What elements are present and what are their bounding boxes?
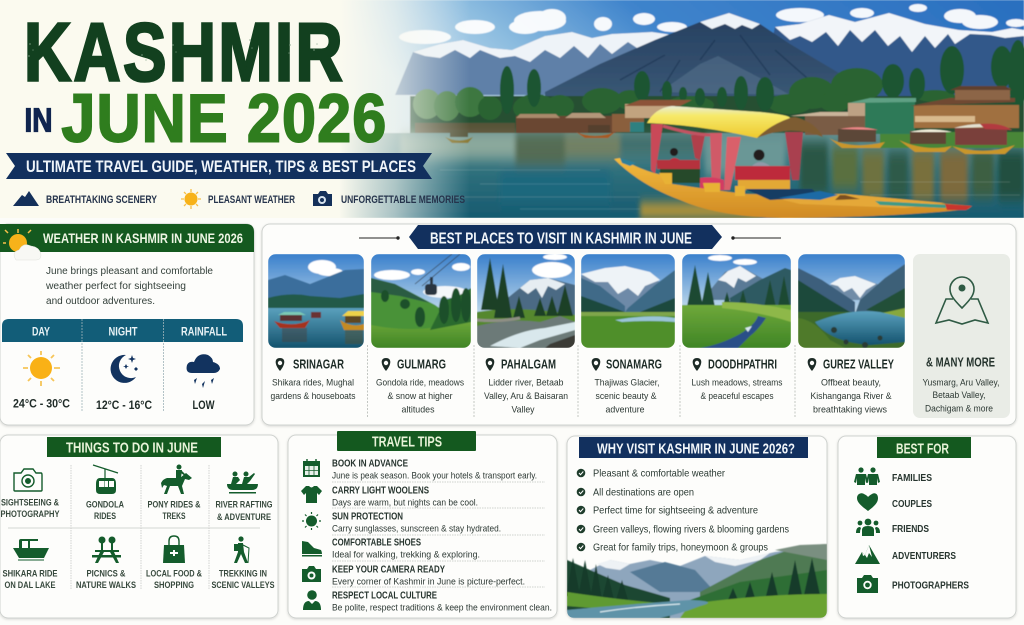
hull bbox=[614, 158, 972, 218]
snowy range right bbox=[773, 17, 1024, 97]
shikara bbox=[614, 106, 972, 218]
tip: carry light woolens bbox=[301, 486, 478, 508]
place: Doodhpathri: DOODHPATHRI bbox=[708, 358, 777, 372]
left houses bbox=[516, 116, 616, 133]
audience: families bbox=[854, 467, 932, 485]
curtains bbox=[651, 124, 663, 174]
place: Pahalgam: Valley, Aru & Baisaran bbox=[484, 391, 568, 402]
activity: local food and shopping: SHOPPING bbox=[154, 580, 194, 591]
weather values: 12°C - 16°C bbox=[96, 398, 152, 412]
activity: rafting bbox=[216, 472, 272, 523]
activity: gondola: RIDES bbox=[94, 511, 116, 522]
why visit heading bbox=[579, 437, 808, 458]
activity: shikara bbox=[2, 539, 58, 591]
central dark mountain bbox=[544, 22, 838, 97]
passengers bbox=[670, 148, 678, 156]
photo: Gurez Valley bbox=[798, 254, 905, 348]
weather table header: RAINFALL bbox=[181, 324, 227, 338]
panel: why visit bbox=[566, 436, 827, 618]
tip: respect local culture bbox=[303, 590, 552, 614]
hero photo: lake, mountains and shikara bbox=[0, 0, 1024, 218]
tip: camera: KEEP YOUR CAMERA READY bbox=[332, 564, 445, 576]
reason: green valleys: Green valleys, flowing rivers & blooming gardens bbox=[593, 524, 789, 536]
icon: night moon bbox=[111, 355, 138, 383]
reason: destinations open: All destinations are open bbox=[593, 486, 694, 498]
card: many more: Dachigam & more bbox=[925, 404, 993, 414]
weather values: 24°C - 30°C bbox=[13, 396, 70, 410]
deck bbox=[760, 194, 945, 208]
audience: couples: COUPLES bbox=[892, 498, 932, 510]
highlights row bbox=[13, 189, 465, 209]
place: Sonamarg: SONAMARG bbox=[606, 358, 662, 372]
card: many more: Betaab Valley, bbox=[932, 390, 986, 401]
tip: carry light woolens: CARRY LIGHT WOOLENS bbox=[332, 486, 429, 496]
place: Pahalgam: Valley bbox=[512, 404, 535, 416]
tip: book in advance: June is peak season. Book your hotels & transport early. bbox=[332, 470, 537, 482]
reason: family trips: Great for family trips, honeymoon & groups bbox=[593, 542, 768, 554]
activity: gondola: GONDOLA bbox=[86, 500, 124, 510]
title block bbox=[24, 6, 388, 156]
subtitle ribbon: ULTIMATE TRAVEL GUIDE, WEATHER, TIPS & BEST PLACES bbox=[26, 157, 416, 176]
activity: pony rides: TREKS bbox=[162, 511, 186, 522]
title: IN: IN bbox=[24, 102, 52, 138]
small boats bbox=[445, 124, 1015, 154]
icon: sun bbox=[181, 189, 201, 209]
far snowy range bbox=[395, 42, 636, 96]
activity: trekking: SCENIC VALLEYS bbox=[212, 580, 274, 591]
place: Doodhpathri: Lush meadows, streams bbox=[692, 378, 783, 388]
place: Gulmarg: altitudes bbox=[402, 404, 435, 416]
activity: local food and shopping bbox=[146, 536, 202, 591]
weather header bar bbox=[0, 224, 254, 252]
canopy bbox=[647, 106, 790, 138]
activity: shikara: SHIKARA RIDE bbox=[2, 568, 58, 580]
activity: shikara: ON DAL LAKE bbox=[4, 580, 56, 591]
photo: Srinagar bbox=[268, 254, 364, 348]
travel tips heading: TRAVEL TIPS bbox=[372, 434, 442, 450]
card: many more bbox=[913, 254, 1010, 418]
water reflections bbox=[400, 133, 1024, 218]
reason: sightseeing: Perfect time for sightseeing & adventure bbox=[593, 504, 758, 516]
activity: sightseeing bbox=[0, 469, 60, 520]
icon: day sun bbox=[23, 351, 60, 386]
place: Srinagar: Shikara rides, Mughal bbox=[272, 378, 354, 388]
weather values: LOW bbox=[192, 398, 215, 412]
activity: rafting: & ADVENTURE bbox=[217, 512, 271, 523]
weather heading: WEATHER IN KASHMIR IN JUNE 2026 bbox=[43, 230, 243, 246]
round trees bbox=[413, 68, 955, 122]
panel: weather bbox=[0, 224, 254, 425]
place: Gurez Valley: Offbeat beauty, bbox=[821, 378, 881, 388]
place: Pahalgam bbox=[484, 358, 568, 416]
audience: friends: FRIENDS bbox=[892, 523, 929, 535]
photo: Sonamarg bbox=[581, 254, 675, 348]
place: Doodhpathri: & peaceful escapes bbox=[700, 391, 774, 402]
activity: picnics: PICNICS & bbox=[86, 568, 126, 580]
tip: respect local culture: Be polite, respect traditions & keep the environment clean. bbox=[332, 602, 552, 614]
audience: adventurers: ADVENTURERS bbox=[892, 550, 956, 562]
card: many more: & MANY MORE bbox=[926, 356, 995, 370]
icon: sun behind cloud bbox=[3, 229, 41, 260]
tip: sun protection bbox=[302, 512, 501, 534]
tip: carry light woolens: Days are warm, but nights can be cool. bbox=[332, 498, 478, 508]
text: pleasant weather: PLEASANT WEATHER bbox=[208, 194, 295, 206]
weather values bbox=[13, 396, 215, 412]
tip: comfortable shoes bbox=[302, 538, 480, 560]
card: many more: Yusmarg, Aru Valley, bbox=[922, 378, 1000, 388]
text: breathtaking scenery: BREATHTAKING SCENERY bbox=[46, 194, 158, 206]
panel: best places bbox=[262, 224, 1016, 425]
poplars bbox=[500, 40, 1024, 114]
audience: families: FAMILIES bbox=[892, 472, 932, 484]
activity: sightseeing: SIGHTSEEING & bbox=[1, 498, 59, 508]
title: KASHMIR: KASHMIR bbox=[24, 6, 345, 98]
activity: rafting: RIVER RAFTING bbox=[216, 500, 272, 510]
travel tips heading bbox=[337, 431, 476, 451]
best places ribbon heading: BEST PLACES TO VISIT IN KASHMIR IN JUNE bbox=[430, 230, 692, 248]
audience: photographers bbox=[857, 575, 969, 593]
audience: couples bbox=[857, 493, 932, 511]
tip: comfortable shoes: COMFORTABLE SHOES bbox=[332, 538, 421, 548]
why visit heading: WHY VISIT KASHMIR IN JUNE 2026? bbox=[597, 440, 795, 458]
activity: pony rides bbox=[148, 464, 201, 522]
text: unforgettable memories: UNFORGETTABLE MEMORIES bbox=[341, 194, 465, 206]
tip: sun protection: Carry sunglasses, sunscreen & stay hydrated. bbox=[332, 524, 501, 534]
icon: camera bbox=[313, 191, 332, 206]
activity: picnics: NATURE WALKS bbox=[76, 580, 136, 591]
canopy back bbox=[757, 117, 823, 138]
place: Sonamarg: adventure bbox=[606, 404, 644, 416]
reason: pleasant weather: Pleasant & comfortable weather bbox=[593, 468, 725, 480]
tip: camera: Every corner of Kashmir in June is picture-perfect. bbox=[332, 576, 525, 588]
place: Sonamarg bbox=[592, 358, 662, 416]
place: Gulmarg: Gondola ride, meadows bbox=[376, 378, 464, 388]
water bbox=[340, 133, 1024, 218]
weather description bbox=[45, 266, 213, 307]
place: Gurez Valley: breathtaking views bbox=[813, 404, 887, 416]
place: Gulmarg: & snow at higher bbox=[388, 391, 452, 402]
place: Pahalgam: PAHALGAM bbox=[501, 358, 556, 372]
best for heading: BEST FOR bbox=[896, 440, 949, 458]
best places ribbon heading bbox=[359, 225, 781, 249]
place: Gurez Valley bbox=[808, 358, 894, 416]
activity: local food and shopping: LOCAL FOOD & bbox=[146, 568, 202, 580]
place: Sonamarg: scenic beauty & bbox=[596, 391, 657, 402]
right houses bbox=[805, 115, 865, 135]
best for heading bbox=[877, 437, 971, 458]
audience: adventurers bbox=[855, 545, 956, 564]
panel: things to do bbox=[0, 435, 278, 618]
weather description: and outdoor adventures. bbox=[46, 296, 155, 307]
photo: Pahalgam bbox=[477, 254, 575, 348]
icon: rain cloud bbox=[187, 354, 220, 388]
panel: best for bbox=[838, 436, 1016, 618]
things heading: THINGS TO DO IN JUNE bbox=[66, 440, 198, 456]
place: Sonamarg: Thajiwas Glacier, bbox=[594, 378, 660, 388]
weather table header bbox=[2, 319, 243, 342]
weather description: weather perfect for sightseeing bbox=[45, 281, 186, 292]
place: Pahalgam: Lidder river, Betaab bbox=[488, 378, 564, 388]
icon: map with pin bbox=[936, 277, 988, 324]
activity: trekking: TREKKING IN bbox=[219, 568, 267, 580]
activity: sightseeing: PHOTOGRAPHY bbox=[0, 509, 60, 520]
activity: trekking bbox=[212, 536, 274, 591]
place: Srinagar: SRINAGAR bbox=[293, 358, 344, 372]
place: Srinagar bbox=[270, 358, 356, 402]
weather description: June brings pleasant and comfortable bbox=[46, 266, 213, 277]
subtitle ribbon bbox=[6, 153, 432, 179]
place: Gulmarg bbox=[376, 358, 464, 416]
weather table header: DAY bbox=[32, 324, 50, 338]
tip: sun protection: SUN PROTECTION bbox=[332, 512, 403, 522]
icon: mountains bbox=[13, 191, 39, 206]
audience: photographers: PHOTOGRAPHERS bbox=[892, 580, 969, 592]
panel: travel tips bbox=[288, 431, 557, 618]
landscape photo bbox=[566, 544, 827, 618]
audience: friends bbox=[856, 519, 929, 536]
tip: respect local culture: RESPECT LOCAL CULTURE bbox=[332, 590, 437, 602]
activity: gondola bbox=[86, 465, 124, 522]
place: Gurez Valley: Kishanganga River & bbox=[810, 391, 892, 402]
tip: camera bbox=[302, 564, 525, 588]
green bank right bbox=[880, 132, 1024, 148]
photo: Gulmarg bbox=[371, 254, 471, 348]
tree band ground bbox=[410, 96, 1024, 136]
place: Srinagar: gardens & houseboats bbox=[270, 391, 356, 402]
activity: picnics bbox=[76, 536, 136, 591]
place: Gurez Valley: GUREZ VALLEY bbox=[823, 358, 894, 372]
photo: Doodhpathri bbox=[682, 254, 791, 348]
activity: pony rides: PONY RIDES & bbox=[148, 500, 201, 510]
place: Doodhpathri bbox=[692, 358, 783, 402]
weather table header: NIGHT bbox=[108, 324, 138, 338]
tip: comfortable shoes: Ideal for walking, trekking & exploring. bbox=[332, 550, 480, 560]
left fade bbox=[0, 0, 470, 218]
tip: book in advance: BOOK IN ADVANCE bbox=[332, 458, 408, 470]
place: Gulmarg: GULMARG bbox=[397, 358, 446, 372]
tip: book in advance bbox=[303, 458, 537, 482]
title: JUNE 2026: JUNE 2026 bbox=[62, 80, 388, 156]
